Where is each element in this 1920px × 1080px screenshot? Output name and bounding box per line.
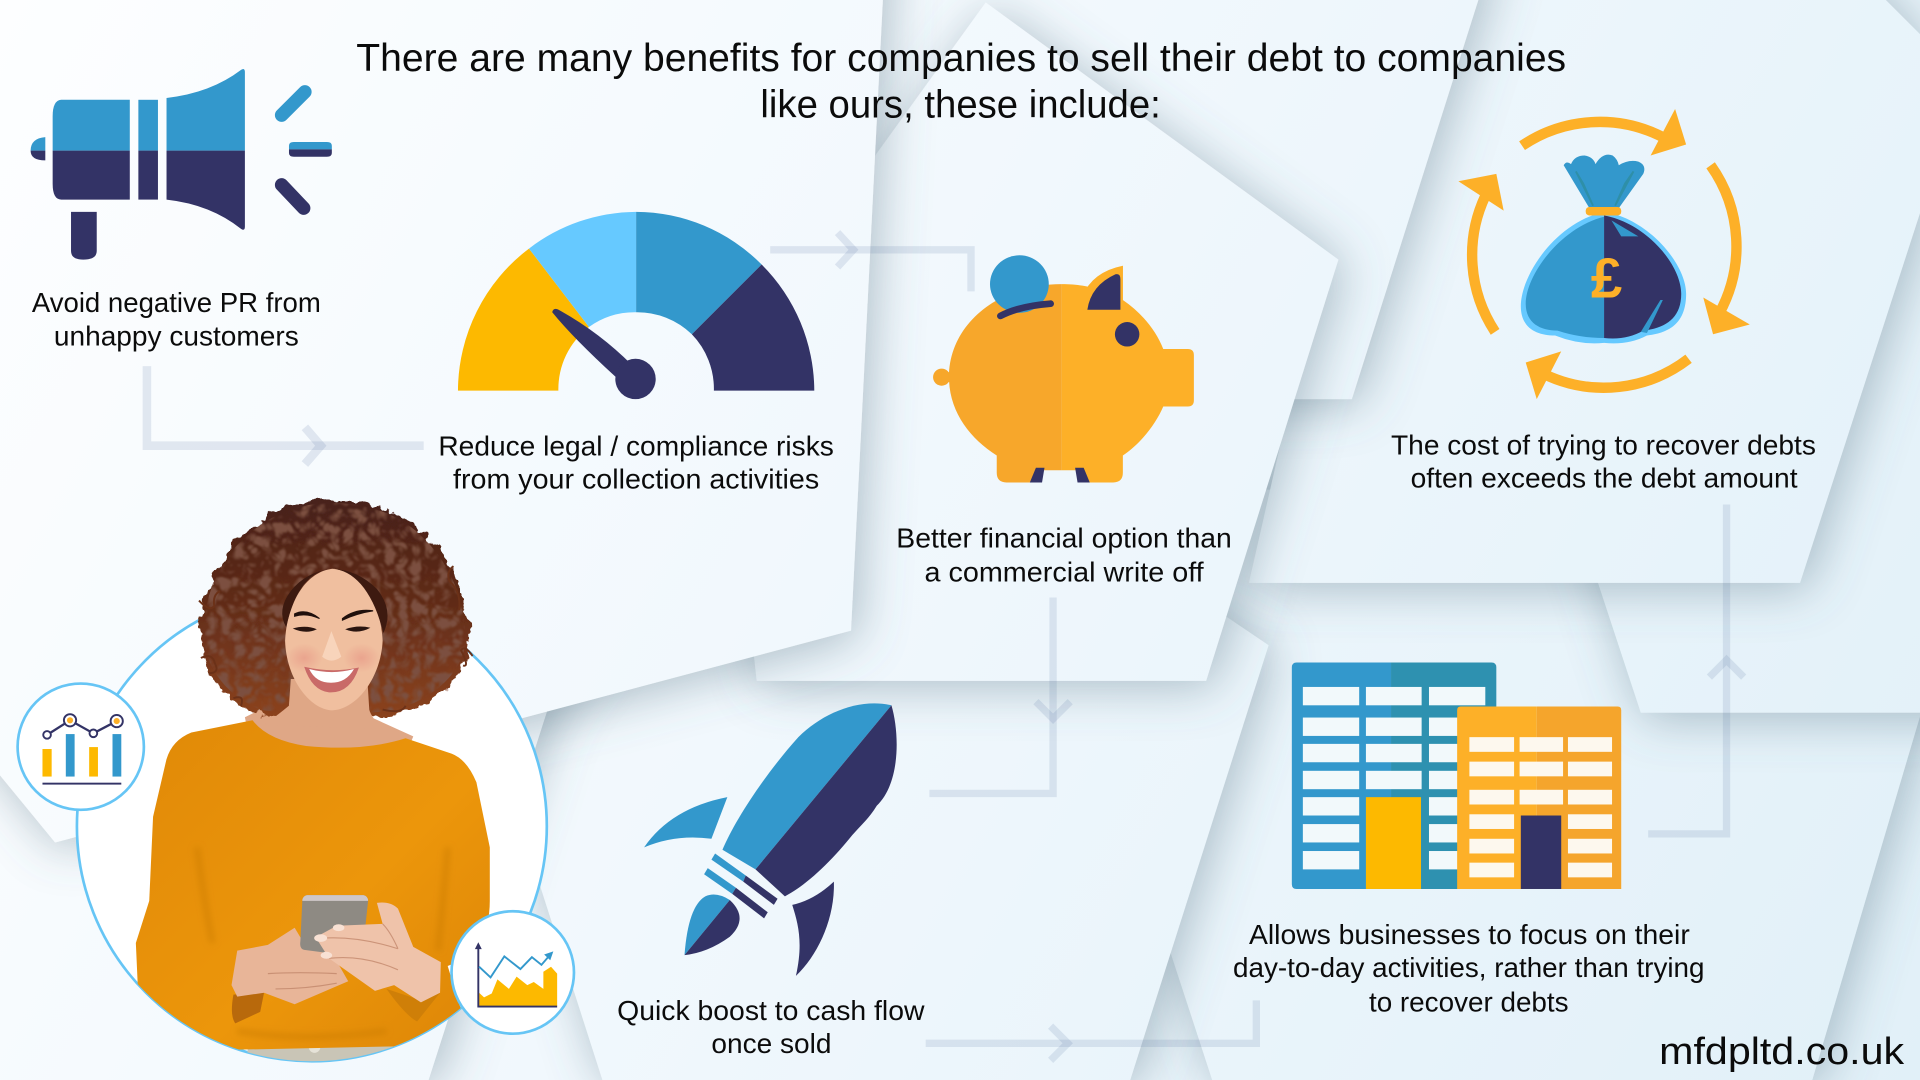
caption: legal risks — [438, 431, 834, 495]
caption: financial option: a commercial write off — [924, 557, 1204, 588]
backdrop circle — [77, 591, 547, 1061]
title: like ours, these include: — [760, 84, 1161, 127]
connector arrow: legal to piggy bank — [770, 233, 971, 291]
caption: recovery cost — [1391, 429, 1816, 493]
caption: financial option: Better financial option than — [896, 522, 1232, 553]
icon: gauge — [458, 212, 814, 399]
caption: cash flow: Quick boost to cash flow — [617, 995, 925, 1026]
connector arrow: piggy bank to rocket — [929, 598, 1070, 793]
icon: money bag with cycle arrows — [1458, 109, 1750, 399]
icon: rocket — [644, 703, 897, 976]
caption: cash flow — [617, 995, 925, 1059]
caption: focus on activities: day-to-day activities, rather than trying — [1233, 952, 1704, 983]
photo: woman in circle — [18, 499, 574, 1069]
hair — [199, 499, 473, 718]
body clipped to circle — [136, 687, 490, 1069]
hands — [232, 928, 348, 1004]
caption: focus on activities — [1233, 919, 1704, 1017]
connector arrow: PR to legal — [147, 366, 424, 464]
background facets — [1169, 490, 1920, 1080]
caption: cash flow: once sold — [711, 1028, 831, 1059]
caption: negative PR: unhappy customers — [54, 320, 299, 351]
caption: financial option — [896, 522, 1232, 588]
caption: legal risks: from your collection activities — [453, 464, 819, 495]
website address: mfdpltd.co.uk — [1659, 1031, 1905, 1073]
caption: recovery cost: often exceeds the debt amount — [1411, 462, 1798, 493]
caption: negative PR — [32, 287, 321, 351]
badge: area chart — [452, 911, 574, 1034]
icon: money bag with cycle arrows: £ — [1591, 247, 1622, 310]
cycle arrows — [1458, 109, 1750, 399]
caption: negative PR: Avoid negative PR from — [32, 287, 321, 318]
caption: legal risks: Reduce legal / compliance risks — [438, 431, 834, 462]
icon: piggy bank — [933, 255, 1194, 482]
badge: bar and line chart — [18, 684, 144, 810]
bag — [1521, 212, 1686, 343]
title — [356, 37, 1566, 127]
connector arrow: rocket to buildings — [926, 1000, 1256, 1060]
title: There are many benefits for companies to sell their debt to companies — [356, 37, 1566, 80]
connector arrow: buildings to money bag — [1648, 504, 1744, 834]
icon: megaphone — [31, 69, 332, 260]
neck and face — [264, 679, 383, 729]
fingers — [314, 902, 441, 1002]
icon: office buildings — [1292, 662, 1621, 889]
caption: recovery cost: The cost of trying to recover debts — [1391, 429, 1816, 460]
caption: focus on activities: Allows businesses to focus on their — [1249, 919, 1690, 950]
caption: focus on activities: to recover debts — [1369, 986, 1569, 1017]
phone — [300, 895, 368, 953]
